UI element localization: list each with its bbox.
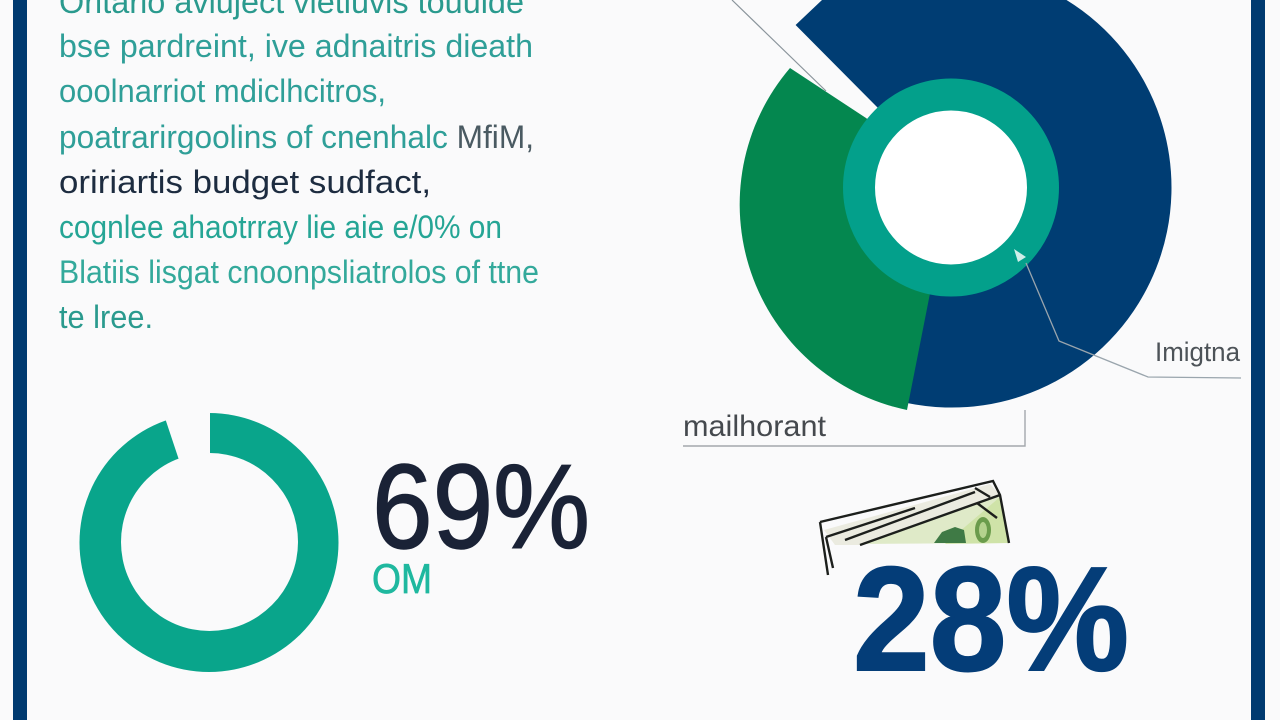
- callout label: bottom: [683, 410, 1025, 446]
- right border bar: [1251, 0, 1265, 720]
- pie chart: [740, 0, 1171, 410]
- leader line: top left: [732, 0, 826, 91]
- text block: budget description: te lree.: [59, 299, 153, 335]
- icon: banknotes: [820, 481, 1009, 575]
- text block: budget description: oririartis budget sudfact,: [59, 164, 431, 200]
- text block: budget description: bse pardreint, ive adnaitris dieath: [59, 28, 533, 64]
- callout label: bottom: mailhorant: [683, 410, 827, 443]
- donut chart: 89 percent: [80, 405, 338, 672]
- text block: budget description: poatrarirgoolins of cnenhalc MfiM,: [59, 119, 534, 155]
- inner teal ring: [859, 94, 1043, 280]
- text block: budget description: Blatiis lisgat cnoonpsliatrolos of ttne: [59, 254, 539, 290]
- text block: budget description: ooolnarriot mdiclhcitros,: [59, 73, 386, 109]
- pie segment: navy: [796, 0, 1171, 408]
- text block: budget description: cognlee ahaotrray lie aie e/0% on: [59, 209, 502, 245]
- text block: budget description: [59, 0, 539, 335]
- leader line and label: right: [1014, 249, 1241, 378]
- left border bar: [13, 0, 27, 720]
- leader line and label: right: Imigtna: [1155, 337, 1241, 367]
- stat label: OM: OM: [372, 555, 432, 602]
- stat: 69 percent: 69%: [372, 440, 590, 574]
- pie segment: green: [740, 68, 951, 410]
- stat: 28 percent: 28%: [853, 537, 1129, 702]
